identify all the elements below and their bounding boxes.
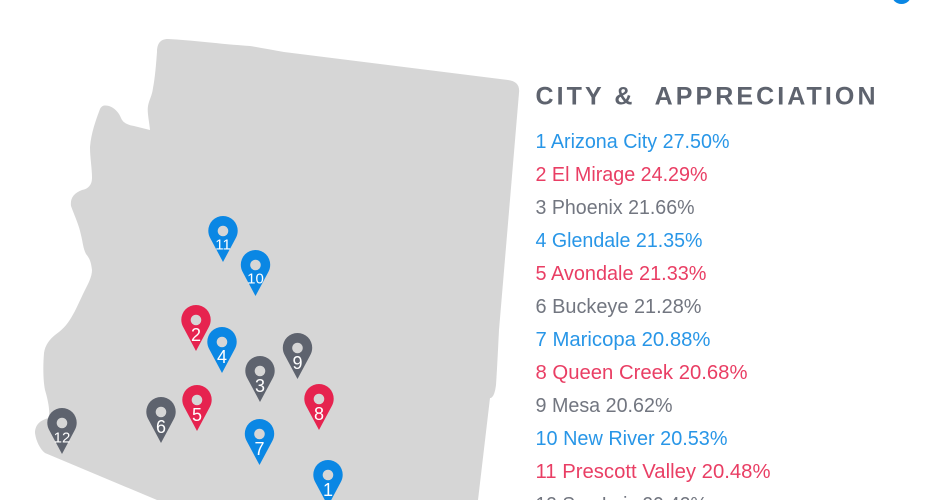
pin 12: 12 bbox=[54, 430, 70, 446]
pin 7: 7 bbox=[254, 439, 265, 459]
pin 10: 10 bbox=[247, 270, 264, 288]
pin 5 bbox=[182, 385, 212, 431]
pin 6: 6 bbox=[156, 417, 166, 437]
pin 10 bbox=[241, 250, 270, 296]
icon: partial blue pin at top edge bbox=[892, 0, 912, 4]
pin 2: 2 bbox=[191, 325, 201, 345]
legend list: cities and appreciation: 9 Mesa 20.62% bbox=[536, 395, 673, 417]
pin 9: 9 bbox=[292, 353, 303, 373]
pin 8 bbox=[304, 384, 334, 430]
pin 3: 3 bbox=[255, 376, 265, 396]
pin 6 bbox=[146, 397, 176, 443]
legend list: cities and appreciation: 11 Prescott Valley 20.48% bbox=[536, 461, 771, 483]
pin 4: 4 bbox=[217, 347, 227, 367]
pin 11: 11 bbox=[215, 236, 231, 254]
pin 1 bbox=[313, 460, 343, 500]
heading: CITY & APPRECIATION bbox=[536, 82, 876, 110]
legend list: cities and appreciation: 6 Buckeye 21.28% bbox=[536, 296, 702, 318]
map: Arizona silhouette bbox=[35, 39, 519, 500]
legend list: cities and appreciation: 3 Phoenix 21.66% bbox=[536, 197, 695, 219]
pin 12 bbox=[47, 408, 77, 454]
pin 5: 5 bbox=[192, 405, 202, 425]
legend list: cities and appreciation: 4 Glendale 21.35% bbox=[536, 230, 703, 252]
pin 11 bbox=[208, 216, 238, 262]
pin 2 bbox=[181, 305, 211, 351]
pin 9 bbox=[283, 333, 312, 379]
legend list: cities and appreciation: 7 Maricopa 20.88% bbox=[536, 329, 711, 351]
pin 8: 8 bbox=[314, 404, 324, 424]
legend list: cities and appreciation bbox=[536, 131, 771, 500]
legend list: cities and appreciation: 1 Arizona City 27.50% bbox=[536, 131, 730, 153]
pin 7 bbox=[245, 419, 274, 465]
legend list: cities and appreciation: 2 El Mirage 24.29% bbox=[536, 164, 708, 186]
pin 4 bbox=[207, 327, 237, 373]
pin 1: 1 bbox=[323, 480, 333, 500]
legend list: cities and appreciation: 10 New River 20.53% bbox=[536, 428, 728, 450]
pin 3 bbox=[245, 356, 275, 402]
legend list: cities and appreciation: 8 Queen Creek 20.68% bbox=[536, 362, 748, 384]
legend list: cities and appreciation: 5 Avondale 21.33% bbox=[536, 263, 707, 285]
